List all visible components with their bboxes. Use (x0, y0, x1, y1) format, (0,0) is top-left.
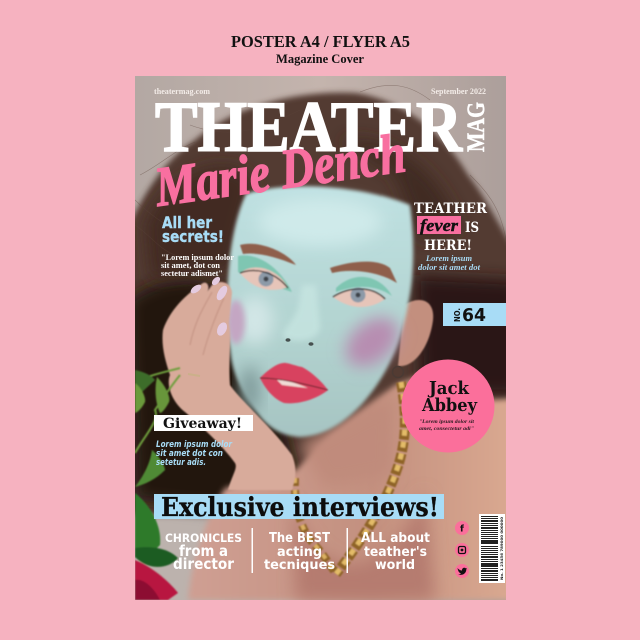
barcode: No. 1 23456 789000 000000 (500, 516, 504, 580)
feature: teather fever: fever (420, 216, 458, 235)
column: teather's world (361, 532, 430, 569)
nose (283, 285, 320, 341)
column: best techniques: The BEST (269, 530, 331, 546)
issue number: 64 (462, 305, 486, 326)
feature: all her secrets: All her (162, 213, 212, 232)
barcode (479, 514, 505, 583)
callout: Jack Abbey: Jack (427, 378, 469, 399)
column: teather's world: teather's (364, 544, 427, 560)
feature: giveaway (154, 415, 253, 468)
feature: all her secrets (161, 213, 234, 278)
column: chronicles: director (173, 555, 235, 573)
blush (338, 309, 404, 374)
feature: giveaway: Lorem ipsum dolor (156, 440, 233, 450)
ring (188, 374, 200, 376)
feature: all her secrets: secrets! (162, 227, 224, 246)
feature: giveaway: Giveaway! (163, 416, 242, 432)
masthead: MAG: MAG (463, 102, 490, 152)
subheading: magazine cover: Magazine Cover (276, 52, 364, 66)
callout: Jack Abbey: Abbey (421, 395, 477, 416)
feature: teather fever: HERE! (424, 238, 472, 254)
column: teather's world: world (375, 557, 415, 573)
callout: Jack Abbey (402, 360, 494, 452)
hair wisps (135, 85, 506, 255)
hand (162, 282, 295, 490)
heading: poster size: POSTER A4 / FLYER A5 (231, 32, 410, 51)
ear (398, 300, 433, 366)
feature: all her secrets: sectetur adismet" (161, 269, 223, 278)
photo: woman portrait (125, 76, 525, 600)
issue number: NO. (453, 308, 462, 322)
icon: facebook (455, 521, 469, 535)
icon: instagram (455, 543, 469, 557)
banner: exclusive interviews: Exclusive interviews! (161, 493, 439, 523)
feature: giveaway: setetur adis. (156, 458, 206, 468)
cover name: Marie Dench: Marie Dench (150, 122, 409, 219)
stem and leaves (135, 368, 180, 600)
earring (392, 366, 404, 378)
feature: all her secrets: "Lorem ipsum dolor (161, 253, 234, 262)
site url: theatermag.com (154, 87, 210, 96)
feature: all her secrets: sit amet, dot con (161, 261, 221, 270)
column: chronicles: from a (179, 542, 228, 560)
column: teather's world: ALL about (361, 530, 430, 546)
column: chronicles: CHRONICLES (165, 531, 242, 545)
issue date: September 2022 (431, 87, 486, 96)
face (227, 186, 413, 437)
left eye (238, 244, 296, 292)
icon: facebook: f (460, 524, 464, 534)
issue number (443, 303, 507, 326)
nails (190, 276, 228, 336)
lips (260, 363, 328, 403)
panel: magazine cover (125, 76, 525, 600)
callout: Jack Abbey: amet, consectetur adi" (419, 426, 474, 432)
hair (125, 93, 525, 515)
gold necklace (295, 382, 405, 574)
callout: Jack Abbey: "Lorem ipsum dolor sit (419, 419, 474, 425)
masthead: THEATER: THEATER (155, 87, 463, 167)
icon: twitter (455, 564, 469, 578)
column: chronicles (166, 534, 242, 569)
column: best techniques: tecniques (264, 557, 335, 573)
feature: teather fever: TEATHER (414, 201, 487, 217)
column: best techniques (264, 530, 335, 573)
feature: teather fever: dolor sit amet dot (418, 263, 481, 272)
body and forearm (188, 375, 525, 600)
column: best techniques: acting (277, 544, 322, 560)
feature: teather fever (414, 201, 487, 272)
feature: teather fever: IS (465, 220, 479, 236)
feature: giveaway: sit amet dot con (156, 449, 223, 459)
right eye (330, 262, 397, 307)
feature: teather fever: Lorem ipsum (425, 254, 472, 263)
